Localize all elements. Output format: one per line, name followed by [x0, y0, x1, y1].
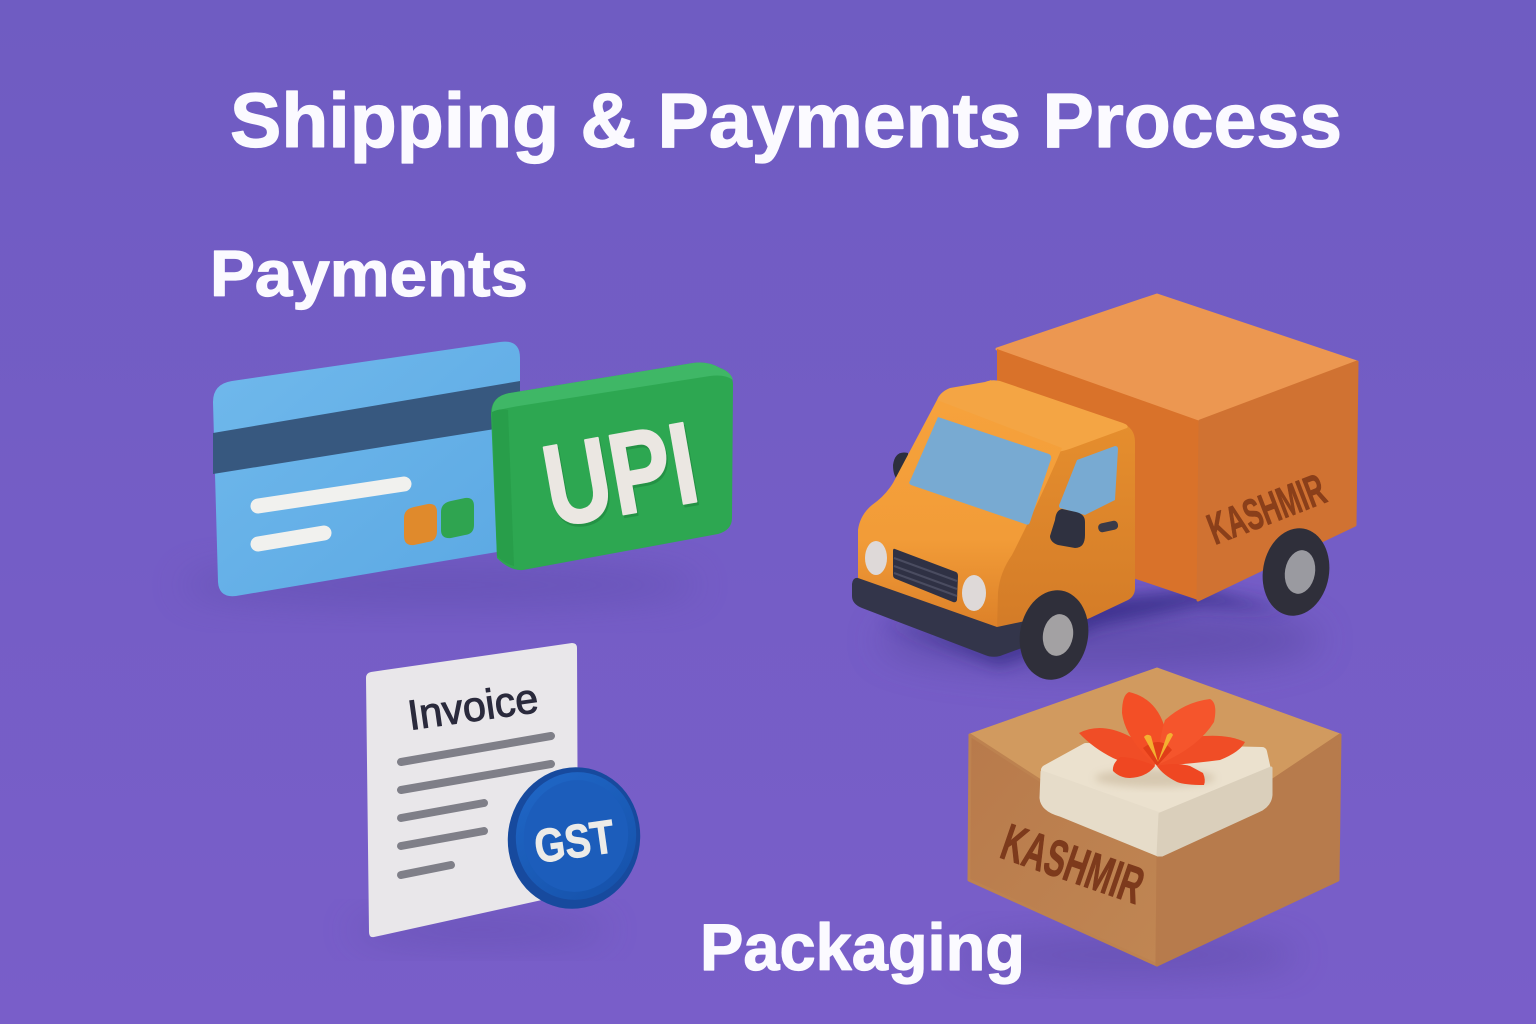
cab front [858, 400, 1062, 630]
invoice sheet [366, 643, 578, 937]
cushion [1041, 748, 1271, 855]
front wheel [1013, 585, 1095, 685]
cab [852, 380, 1135, 657]
GST badge: GST [531, 809, 618, 873]
cargo box [997, 295, 1357, 600]
door handle [1097, 520, 1119, 533]
shadow: truck [880, 590, 1320, 672]
parcel [969, 669, 1340, 965]
flower centre [1143, 742, 1172, 766]
icon: delivery truck [852, 295, 1357, 685]
UPI block: UPI [534, 397, 707, 552]
flower stamens [1144, 735, 1158, 762]
card text lines [258, 484, 404, 544]
credit card [213, 342, 520, 596]
cab roof [937, 380, 1128, 452]
flower [1079, 692, 1245, 785]
heading: Payments: Payments [210, 237, 528, 310]
side window [1059, 446, 1118, 515]
UPI block [491, 363, 733, 570]
cab silhouette and side [930, 380, 1135, 645]
flower shadow [1095, 769, 1215, 787]
rear wheel [1256, 523, 1336, 621]
grille [893, 549, 958, 602]
title: Shipping & Payments Process [230, 78, 1342, 164]
flower petals [1079, 728, 1155, 766]
bumper [852, 578, 1030, 657]
left mirror [893, 452, 908, 481]
windshield [909, 417, 1051, 525]
icon: invoice with GST badge [350, 643, 653, 944]
card chips [404, 498, 474, 545]
side mirror [1050, 509, 1085, 548]
icon: parcel box with saffron flower [960, 669, 1340, 975]
card stripe [213, 381, 520, 474]
shadow: invoice [350, 916, 610, 944]
GST badge [495, 755, 653, 921]
parcel label: KASHMIR [994, 814, 1151, 916]
headlights [865, 541, 986, 611]
heading: Packaging: Packaging [700, 910, 1025, 984]
invoice lines [401, 736, 551, 875]
shadow: parcel [960, 935, 1300, 975]
truck label: KASHMIR [1201, 465, 1332, 554]
invoice heading: Invoice [405, 674, 541, 739]
UPI label: UPI [535, 400, 709, 554]
shadow: payment icons [180, 563, 700, 607]
icon: payment card and UPI [180, 342, 733, 607]
